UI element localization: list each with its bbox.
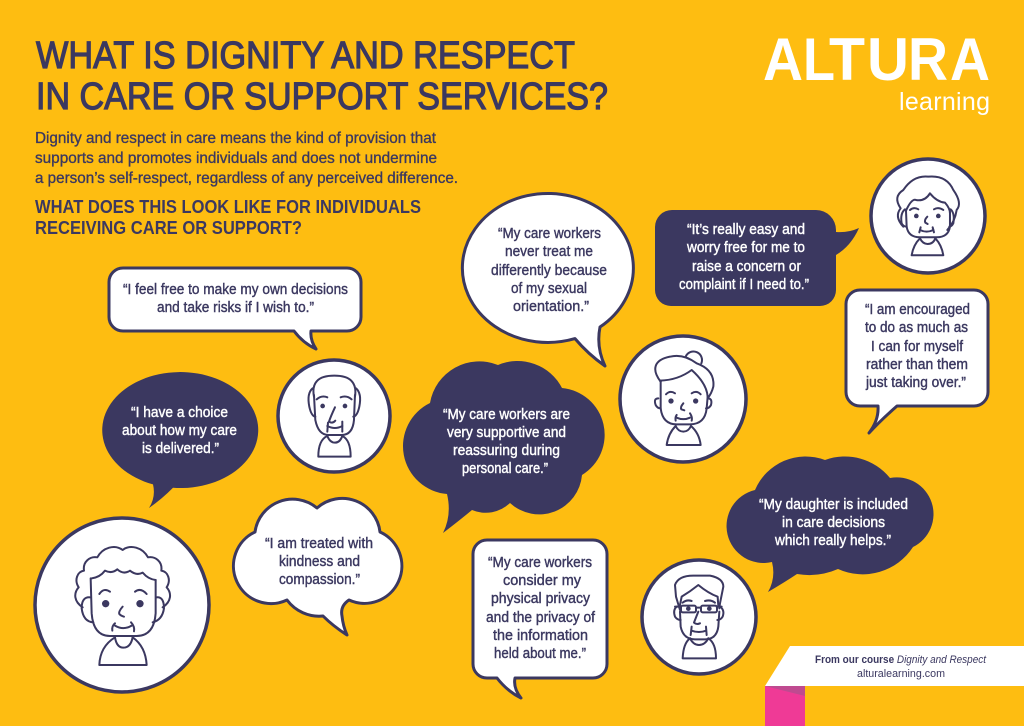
speech bubble: raise a concern [655, 210, 859, 306]
quote text [679, 222, 809, 293]
quote text: held about me.” [494, 646, 586, 662]
icon: bald man face [308, 376, 360, 457]
speech bubble: supportive and reassuring [403, 361, 605, 533]
quote text: “My care workers [488, 555, 592, 571]
quote text: kindness and [279, 554, 360, 570]
quote text [123, 282, 348, 316]
icon: woman with bun face [655, 351, 713, 445]
quote text: never treat me [505, 244, 593, 260]
quote text: I can for myself [871, 339, 964, 355]
quote text: “My care workers are [443, 407, 570, 423]
quote text: worry free for me to [686, 240, 805, 256]
quote text: “I am encouraged [865, 302, 970, 318]
quote text: orientation.” [513, 299, 589, 315]
quote text: differently because [491, 263, 607, 279]
subheading: RECEIVING CARE OR SUPPORT? [35, 218, 302, 238]
ribbon: pink fold [765, 686, 805, 726]
speech bubble: make my own decisions [109, 268, 361, 349]
quote text: reassuring during [453, 443, 560, 459]
logo: Altura learning: L [803, 26, 835, 93]
portrait: bald man [278, 360, 390, 472]
intro text: a person’s self-respect, regardless of any perceived difference. [35, 170, 458, 187]
quote text: “I have a choice [131, 405, 228, 421]
intro text: supports and promotes individuals and does not undermine [35, 150, 437, 167]
quote text: personal care.” [462, 461, 548, 477]
quote text: in care decisions [782, 515, 885, 531]
intro text [35, 130, 458, 187]
portrait: man with glasses [642, 560, 756, 674]
quote text [491, 226, 607, 315]
subheading [35, 197, 421, 238]
quote text: the information [493, 628, 588, 644]
icon: man with glasses face [674, 576, 723, 658]
quote text: rather than them [866, 357, 968, 373]
logo: Altura learning: learning [899, 88, 990, 116]
quote text: physical privacy [491, 591, 591, 607]
logo: Altura learning [763, 26, 990, 116]
quote text: which really helps.” [774, 533, 891, 549]
speech bubble: physical privacy [473, 540, 607, 698]
quote text [486, 555, 596, 662]
course credit: alturalearning.com [857, 668, 945, 680]
portrait: woman with curly hair [35, 518, 209, 692]
quote text [122, 405, 237, 457]
quote text: “I am treated with [265, 536, 373, 552]
quote text: compassion.” [279, 572, 360, 588]
quote text: to do as much as [865, 320, 968, 336]
title [36, 35, 608, 118]
title: WHAT IS DIGNITY AND RESPECT [36, 35, 575, 77]
speech bubble: daughter included [727, 456, 934, 592]
logo: Altura learning: T [829, 26, 865, 93]
icon: wavy haired woman face [897, 176, 959, 255]
course credit [815, 654, 987, 680]
title: IN CARE OR SUPPORT SERVICES? [36, 76, 608, 118]
quote text: “It’s really easy and [687, 222, 805, 238]
quote text: very supportive and [447, 425, 566, 441]
logo: Altura learning: U [867, 26, 909, 93]
quote text: raise a concern or [692, 259, 801, 275]
speech bubble: kindness and compassion [233, 498, 402, 635]
subheading: WHAT DOES THIS LOOK LIKE FOR INDIVIDUALS [35, 197, 421, 217]
logo: Altura learning: R [908, 26, 948, 93]
speech bubble: sexual orientation [462, 193, 633, 366]
quote text [759, 497, 908, 549]
quote text: and take risks if I wish to.” [157, 300, 314, 316]
icon: curly haired woman face [75, 547, 170, 665]
logo: Altura learning: A [763, 26, 803, 93]
course credit: From our course Dignity and Respect [815, 654, 987, 666]
speech bubble: choice of care [102, 372, 258, 508]
quote text: consider my [503, 573, 582, 589]
quote text: “My daughter is included [759, 497, 908, 513]
ribbon: white banner [765, 646, 1024, 686]
quote text [443, 407, 570, 477]
quote text: of my sexual [511, 281, 587, 297]
quote text: complaint if I need to.” [679, 277, 809, 293]
footer ribbon [765, 646, 1024, 726]
speech bubble: encouraged to do as much [846, 290, 988, 433]
quote text [865, 302, 970, 391]
quote text: “I feel free to make my own decisions [123, 282, 348, 298]
quote text: and the privacy of [486, 610, 596, 626]
intro text: Dignity and respect in care means the kind of provision that [35, 130, 437, 147]
portrait: woman with hair bun [620, 336, 746, 462]
quote text: “My care workers [498, 226, 601, 242]
quote text: is delivered.” [142, 441, 219, 457]
quote text: about how my care [122, 423, 237, 439]
quote text: just taking over.” [865, 375, 966, 391]
portrait: older woman with wavy hair [871, 159, 985, 273]
logo: Altura learning: A [950, 26, 990, 93]
quote text [265, 536, 373, 588]
